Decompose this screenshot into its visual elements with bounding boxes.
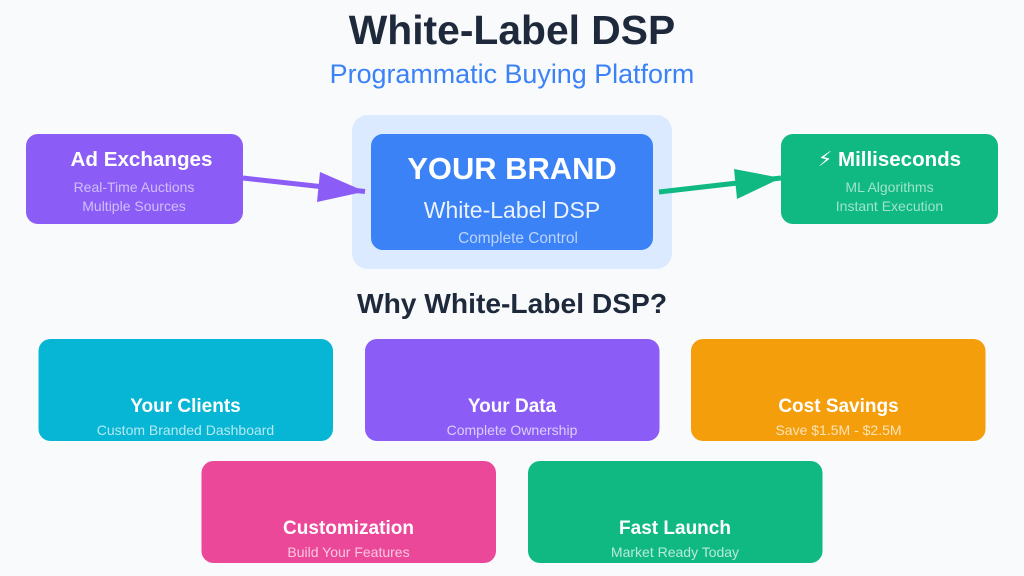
- card: fast launch: Fast Launch: [619, 518, 731, 539]
- subtitle: Programmatic Buying Platform: [330, 59, 694, 89]
- section heading: Why White-Label DSP?: [357, 287, 667, 319]
- card: your clients: Your Clients: [130, 396, 241, 417]
- card: fast launch: [528, 461, 822, 563]
- panel: ad exchanges: Real-Time Auctions: [74, 179, 194, 195]
- title: White-Label DSP: [349, 7, 675, 53]
- card: your clients: Custom Branded Dashboard: [97, 422, 274, 438]
- card: customization: [202, 461, 496, 563]
- arrow: brand to milliseconds: [659, 169, 781, 199]
- card: cost savings: Save $1.5M - $2.5M: [775, 422, 902, 438]
- panel: your brand: White-Label DSP: [424, 197, 600, 223]
- panel: ad exchanges: [26, 134, 243, 224]
- panel: milliseconds: [781, 134, 998, 224]
- card: customization: Customization: [283, 518, 414, 539]
- panel: your brand: [352, 115, 672, 269]
- card: your clients: [38, 339, 333, 441]
- card: customization: Build Your Features: [287, 544, 410, 560]
- card: cost savings: Cost Savings: [778, 396, 899, 417]
- panel: ad exchanges: Multiple Sources: [82, 198, 186, 214]
- panel: your brand: YOUR BRAND: [407, 151, 617, 186]
- arrow: exchanges to brand: [243, 172, 365, 202]
- card: fast launch: Market Ready Today: [611, 544, 739, 560]
- card: cost savings: [691, 339, 986, 441]
- panel: milliseconds: ML Algorithms: [845, 179, 934, 195]
- panel: your brand: Complete Control: [458, 230, 578, 247]
- panel: ad exchanges: Ad Exchanges: [71, 148, 212, 171]
- heading: milliseconds: ⚡︎ Milliseconds: [818, 147, 961, 171]
- card: your data: Your Data: [468, 396, 557, 417]
- card: your data: [365, 339, 660, 441]
- panel: milliseconds: Instant Execution: [836, 198, 943, 214]
- card: your data: Complete Ownership: [447, 422, 578, 438]
